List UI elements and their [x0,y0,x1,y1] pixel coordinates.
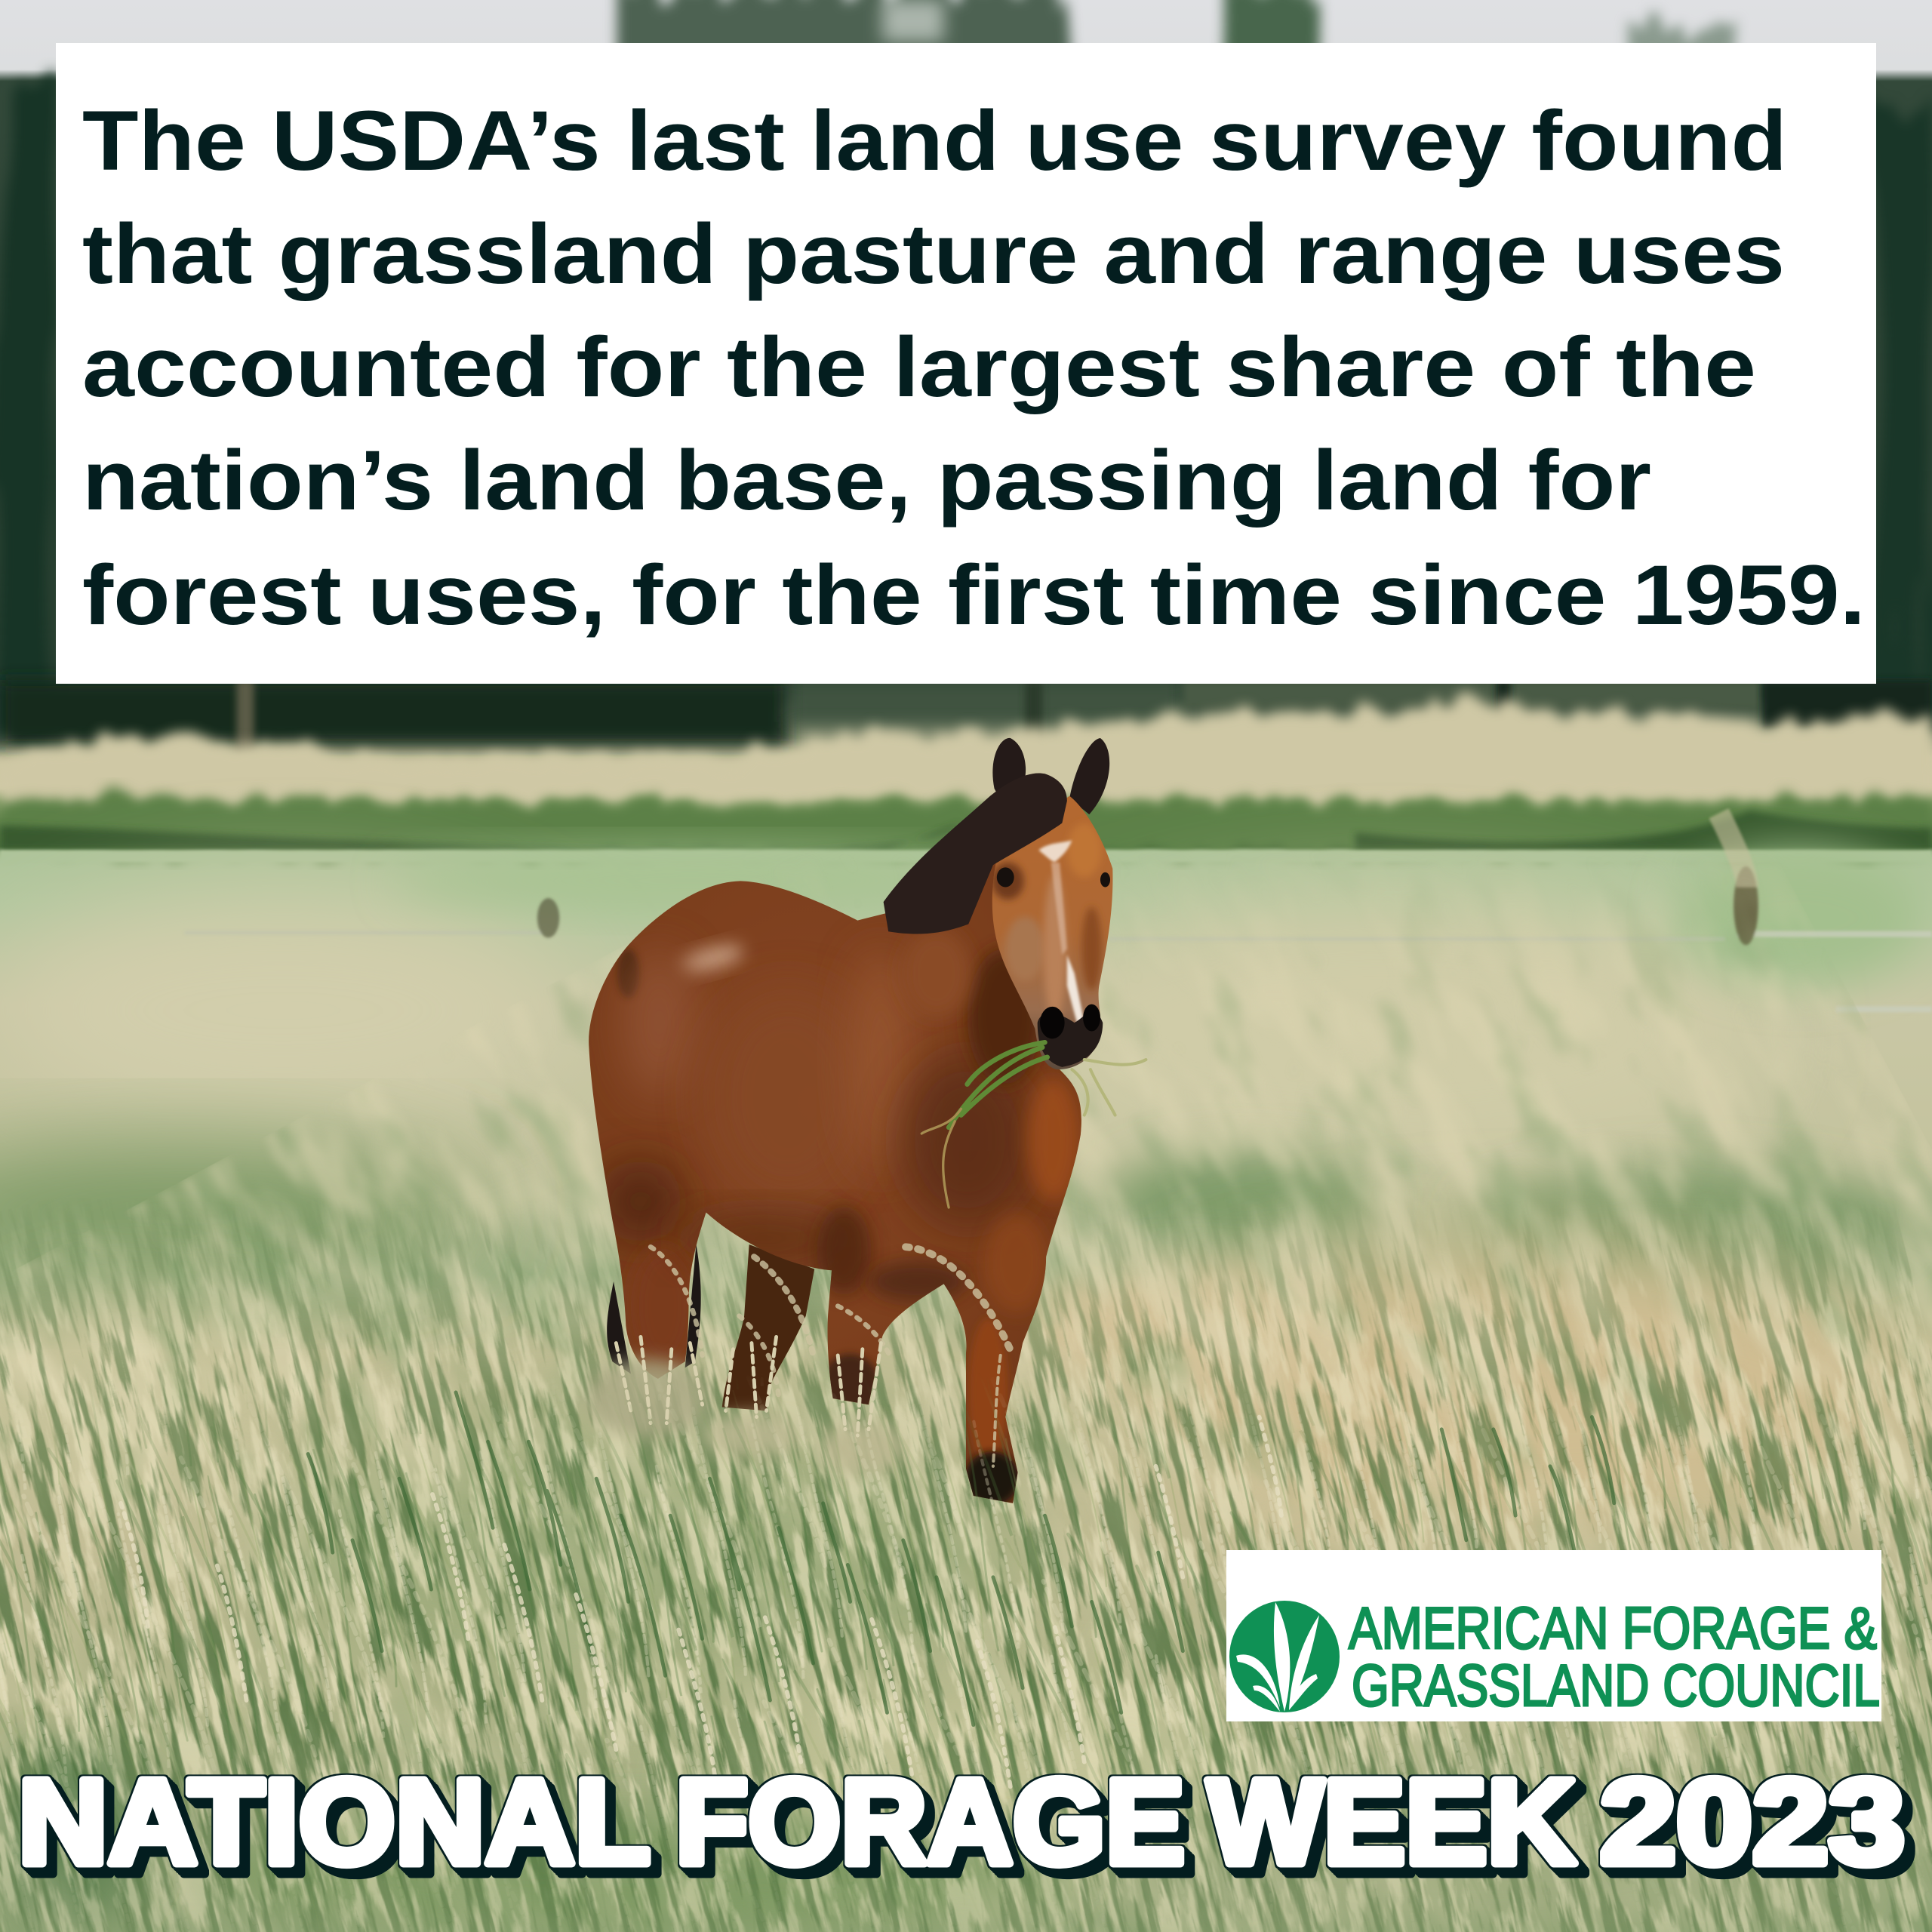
head shading [992,823,1102,1023]
seed heads crossing the legs [651,1247,1013,1466]
icon: grass emblem [1229,1601,1340,1712]
ears [992,738,1109,814]
mane [884,773,1067,934]
statement text [82,94,1866,642]
title: National Forage Week 2023: NATIONAL [18,1754,651,1889]
pale seed clusters [121,1417,1281,1786]
grass in mouth [921,1042,1146,1208]
far foreleg [722,1244,814,1411]
text panel: land use survey statement [56,43,1876,684]
statement text: forest uses, for the first time since 1959. [82,548,1866,642]
statement text: that grassland pasture and range uses [82,207,1785,301]
muzzle [1038,1004,1103,1067]
horse [589,738,1146,1506]
panel background [56,43,1876,684]
logo wordmark [1349,1595,1880,1718]
logo background [1226,1550,1881,1721]
title: National Forage Week 2023: 2023 [1600,1754,1905,1889]
sharp foreground streaks behind the horse [0,1218,1932,1932]
blurred grass streaks [0,900,1932,1932]
title: National Forage Week 2023 [18,1754,1905,1889]
coat shading [598,929,1081,1506]
statement text: accounted for the largest share of the [82,320,1756,414]
green hedge band [0,795,1932,853]
fence wires and posts [185,814,1932,1009]
tall grass hiding the hooves [586,1337,904,1475]
tail [607,1244,701,1374]
face blaze [1038,840,1084,1023]
distant tree line [0,0,1932,754]
head [992,796,1112,1069]
tan far meadow [0,703,1932,801]
title: National Forage Week 2023: WEEK [1208,1754,1576,1889]
body [589,814,1081,1503]
title: National Forage Week 2023: FORAGE [675,1754,1185,1889]
field colour masses [0,851,1922,1930]
dark green grass clusters [308,1392,1614,1725]
statement text: The USDA’s last land use survey found [82,94,1787,188]
foreground grass blades [0,1306,1932,1932]
eyes [997,867,1110,888]
statement text: nation’s land base, passing land for [82,433,1651,528]
logo: American Forage & Grassland Council [1226,1550,1881,1721]
